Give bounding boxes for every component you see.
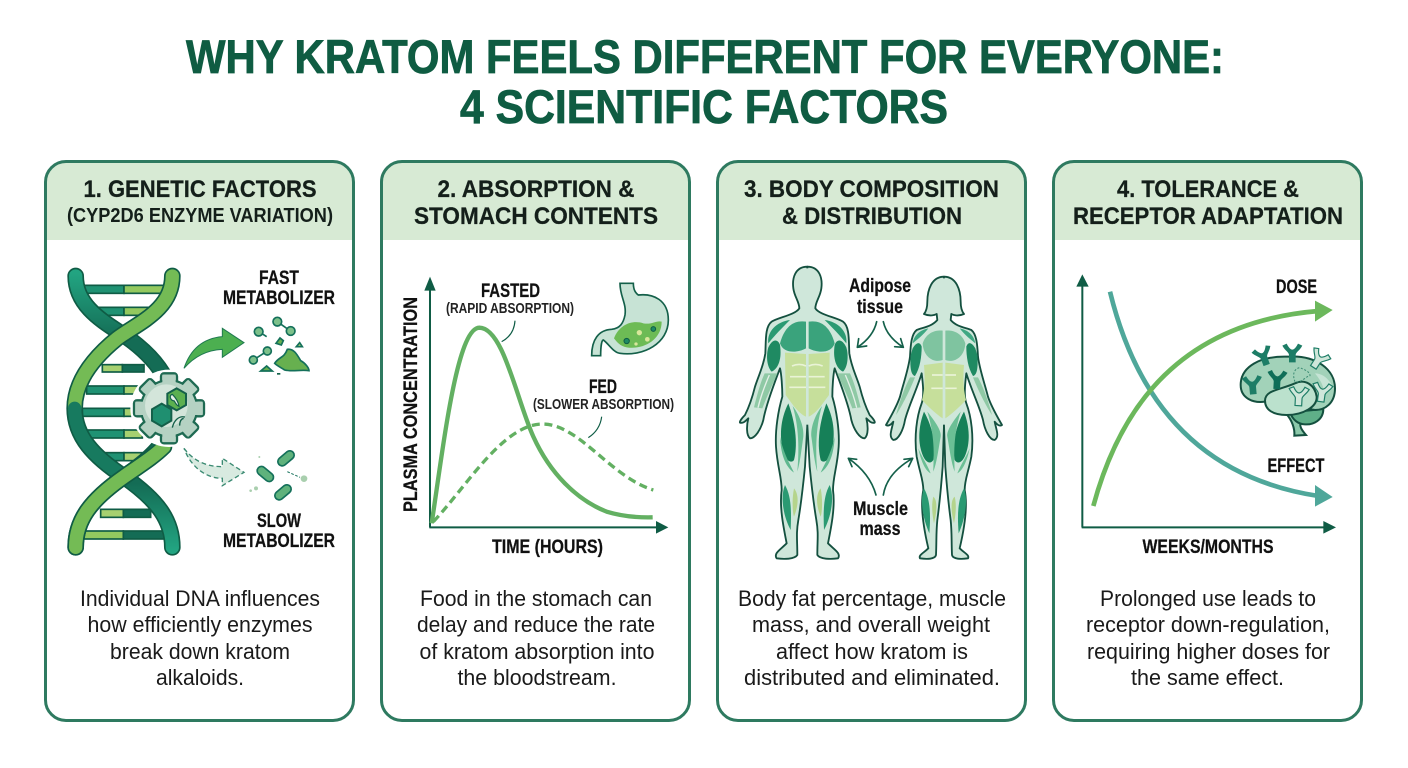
body text: genetic factors: alkaloids.	[156, 665, 244, 690]
panel: tolerance and receptor adaptation	[1054, 162, 1362, 720]
label: fed	[533, 377, 674, 413]
body text: tolerance: receptor down-regulation,	[1086, 612, 1330, 637]
body text: genetic factors: break down kratom	[110, 639, 290, 664]
panel header band: genetic factors	[46, 162, 354, 240]
panel: absorption and stomach contents	[381, 162, 690, 720]
panel frame: body composition	[718, 162, 1026, 720]
panel frame: tolerance	[1054, 162, 1362, 720]
panel header band: absorption	[381, 162, 690, 240]
arrows: muscle mass pointers	[848, 458, 913, 495]
curve: effect	[1110, 292, 1333, 507]
chart axes	[424, 277, 668, 534]
heading: absorption: STOMACH CONTENTS	[414, 203, 658, 230]
body text: tolerance: Prolonged use leads to	[1100, 586, 1316, 611]
body text: body composition: affect how kratom is	[776, 639, 968, 664]
body text: genetic factors: Individual DNA influences	[80, 586, 320, 611]
arrows: adipose tissue pointers	[857, 322, 903, 347]
heading: genetic factors: 1. GENETIC FACTORS	[84, 176, 316, 203]
icon: enzyme gear	[130, 370, 208, 447]
panel: genetic factors	[46, 162, 354, 720]
line chart: dose and effect over time	[1076, 274, 1336, 534]
label: dose: DOSE	[1276, 277, 1317, 298]
body text: body composition	[738, 586, 1006, 690]
body text: body composition: distributed and eliminated.	[744, 665, 1000, 690]
label: slow metabolizer: METABOLIZER	[223, 531, 335, 552]
body text: absorption: the bloodstream.	[458, 665, 616, 690]
label: adipose tissue: tissue	[857, 297, 903, 318]
body text: absorption: delay and reduce the rate	[417, 612, 655, 637]
DNA rungs	[82, 285, 165, 539]
panel frame: genetic factors	[46, 162, 354, 720]
icon: brain with receptors	[1241, 344, 1335, 436]
figure: male	[740, 267, 875, 559]
x axis label: WEEKS/MONTHS	[1142, 537, 1274, 558]
panel header band: body composition	[718, 162, 1026, 240]
title: WHY KRATOM FEELS DIFFERENT FOR EVERYONE:	[186, 30, 1224, 83]
curve: fasted	[432, 328, 653, 523]
title: 4 SCIENTIFIC FACTORS	[460, 80, 948, 133]
panel: body composition	[718, 162, 1026, 720]
icon: slow metabolites	[255, 449, 300, 502]
body text: absorption: Food in the stomach can	[420, 586, 652, 611]
label: muscle mass: mass	[860, 519, 900, 540]
DNA strands	[75, 276, 173, 547]
figure: female	[886, 277, 1002, 559]
label: fed: (SLOWER ABSORPTION)	[533, 396, 674, 413]
heading: absorption	[414, 176, 658, 230]
label: fast metabolizer: FAST	[259, 268, 299, 289]
label: slow metabolizer: SLOW	[257, 511, 301, 532]
curve: dose	[1093, 301, 1333, 506]
body text: absorption	[417, 586, 655, 690]
label: muscle mass: Muscle	[853, 499, 908, 520]
body text: absorption: of kratom absorption into	[420, 639, 654, 664]
body text: body composition: Body fat percentage, muscle	[738, 586, 1006, 611]
illustration: DNA helix and enzyme gear	[75, 276, 309, 547]
label: adipose tissue	[849, 276, 911, 318]
arrow: fast pathway	[184, 328, 244, 368]
icon: fast metabolites	[249, 317, 309, 375]
illustration: male and female bodies	[740, 267, 1002, 559]
heading: body composition	[744, 176, 999, 230]
body text: tolerance	[1086, 586, 1330, 690]
curve: fed	[433, 424, 653, 522]
callout lines	[502, 321, 602, 438]
label: fasted: (RAPID ABSORPTION)	[446, 300, 574, 317]
panel frame: absorption	[382, 162, 690, 720]
chart axes	[1076, 274, 1336, 534]
heading: body composition: & DISTRIBUTION	[782, 203, 962, 230]
label: fasted: FASTED	[481, 281, 540, 302]
y axis label: PLASMA CONCENTRATION	[401, 297, 422, 512]
line chart: plasma concentration over time	[424, 277, 668, 534]
panel header band: tolerance	[1054, 162, 1362, 240]
x axis label: TIME (HOURS)	[492, 537, 603, 558]
body text: tolerance: the same effect.	[1131, 665, 1284, 690]
icon: stomach	[592, 283, 668, 356]
label: fasted	[446, 281, 574, 317]
heading: tolerance: RECEPTOR ADAPTATION	[1073, 203, 1343, 230]
label: fast metabolizer	[223, 268, 335, 309]
label: effect: EFFECT	[1268, 456, 1325, 477]
label: slow metabolizer	[223, 511, 335, 552]
title	[186, 30, 1224, 133]
arrow: slow pathway	[184, 448, 244, 486]
label: fed: FED	[589, 377, 617, 398]
body text: genetic factors: how efficiently enzymes	[88, 612, 312, 637]
heading: tolerance	[1073, 176, 1343, 230]
label: muscle mass	[853, 499, 908, 540]
body text: genetic factors	[80, 586, 320, 690]
label: fast metabolizer: METABOLIZER	[223, 288, 335, 309]
body text: body composition: mass, and overall weight	[752, 612, 990, 637]
label: adipose tissue: Adipose	[849, 276, 911, 297]
body text: tolerance: requiring higher doses for	[1087, 639, 1330, 664]
heading: genetic factors	[67, 176, 333, 227]
heading: tolerance: 4. TOLERANCE &	[1117, 176, 1299, 203]
heading: absorption: 2. ABSORPTION &	[438, 176, 634, 203]
heading: genetic factors: (CYP2D6 ENZYME VARIATION)	[67, 205, 333, 227]
heading: body composition: 3. BODY COMPOSITION	[744, 176, 999, 203]
